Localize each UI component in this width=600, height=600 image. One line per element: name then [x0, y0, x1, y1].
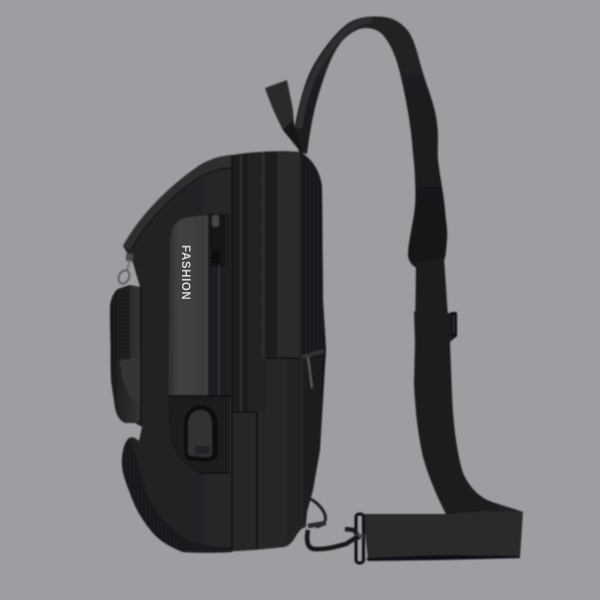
bottom mesh binding	[122, 438, 232, 553]
bag body	[110, 151, 326, 552]
bottom strap end webbing	[363, 511, 523, 561]
USB connector	[184, 405, 218, 462]
strap loop tab	[265, 80, 304, 156]
USB port recess	[168, 397, 230, 473]
top curved zipper binding	[123, 155, 234, 250]
swivel hook and lower attachment loop	[303, 496, 358, 549]
front pocket zipper	[168, 213, 230, 396]
strap adjuster slider	[414, 311, 457, 342]
grey front panel	[168, 215, 208, 395]
product photo: sling bag side view	[109, 16, 524, 566]
zipper pull on upper front	[117, 254, 133, 285]
lower strap webbing	[414, 258, 523, 520]
shoulder strap, upper padded section	[295, 17, 447, 268]
front attached pouch	[110, 285, 141, 424]
side zipper pull	[302, 351, 324, 388]
bag and strap artwork	[110, 17, 523, 563]
vertical zipper bands	[232, 150, 326, 552]
lower strap attachment tab	[298, 494, 308, 530]
brand label: FASHION	[179, 245, 191, 300]
D-ring buckle	[345, 514, 364, 563]
